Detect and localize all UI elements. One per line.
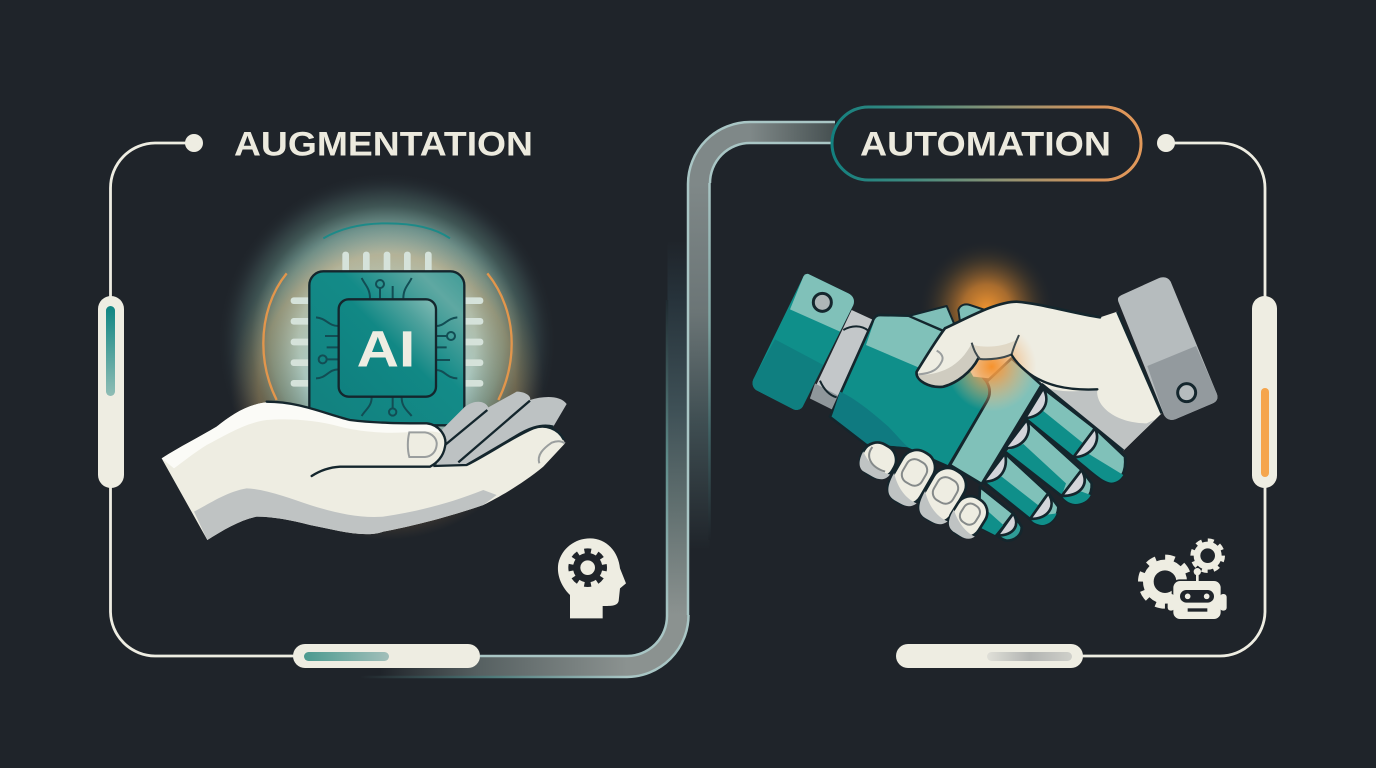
- human finger 3: [913, 462, 972, 529]
- robot finger 4: [978, 487, 1022, 541]
- orange contact glow: [947, 322, 1037, 412]
- illustration: human hand holding AI chip: [162, 172, 567, 540]
- panel: automation frame: [896, 134, 1277, 668]
- human finger 1: [855, 437, 902, 484]
- human fingers: [855, 437, 993, 543]
- robot finger 1: [1025, 388, 1125, 483]
- panel: augmentation frame: [98, 134, 480, 668]
- chip label: AI: [357, 321, 415, 378]
- icon: robot with gears: [1141, 540, 1227, 621]
- robot knuckle scallops: [983, 388, 1046, 482]
- robot wrist: [810, 310, 873, 410]
- robot finger 3: [983, 453, 1058, 525]
- robot thumb strip: [950, 358, 1042, 484]
- human thumb: [917, 302, 1100, 390]
- hand: fingers behind chip: [437, 392, 567, 465]
- chip halo glow: [217, 172, 557, 540]
- human finger 4: [944, 491, 993, 543]
- robot finger 2: [1005, 420, 1092, 504]
- robot cuff: [753, 274, 854, 410]
- heading: augmentation: AUGMENTATION: [234, 126, 533, 164]
- robot palm: [830, 315, 990, 467]
- human hand: [947, 302, 1162, 451]
- heading: automation pill: [832, 107, 1141, 180]
- chip pins: [291, 252, 483, 387]
- hand: palm: [162, 402, 565, 540]
- connector tube between panels: [360, 122, 835, 677]
- orange glow behind handshake: [918, 240, 1055, 377]
- robot back fingers: [908, 304, 985, 333]
- illustration: handshake between robot and human: [753, 240, 1217, 543]
- heading: automation pill: AUTOMATION: [860, 126, 1111, 164]
- human cuff: [1118, 277, 1217, 420]
- AI chip: [309, 271, 464, 425]
- robot fingers: [978, 388, 1125, 541]
- human finger 2: [882, 444, 941, 511]
- icon: head with gear: [558, 538, 626, 618]
